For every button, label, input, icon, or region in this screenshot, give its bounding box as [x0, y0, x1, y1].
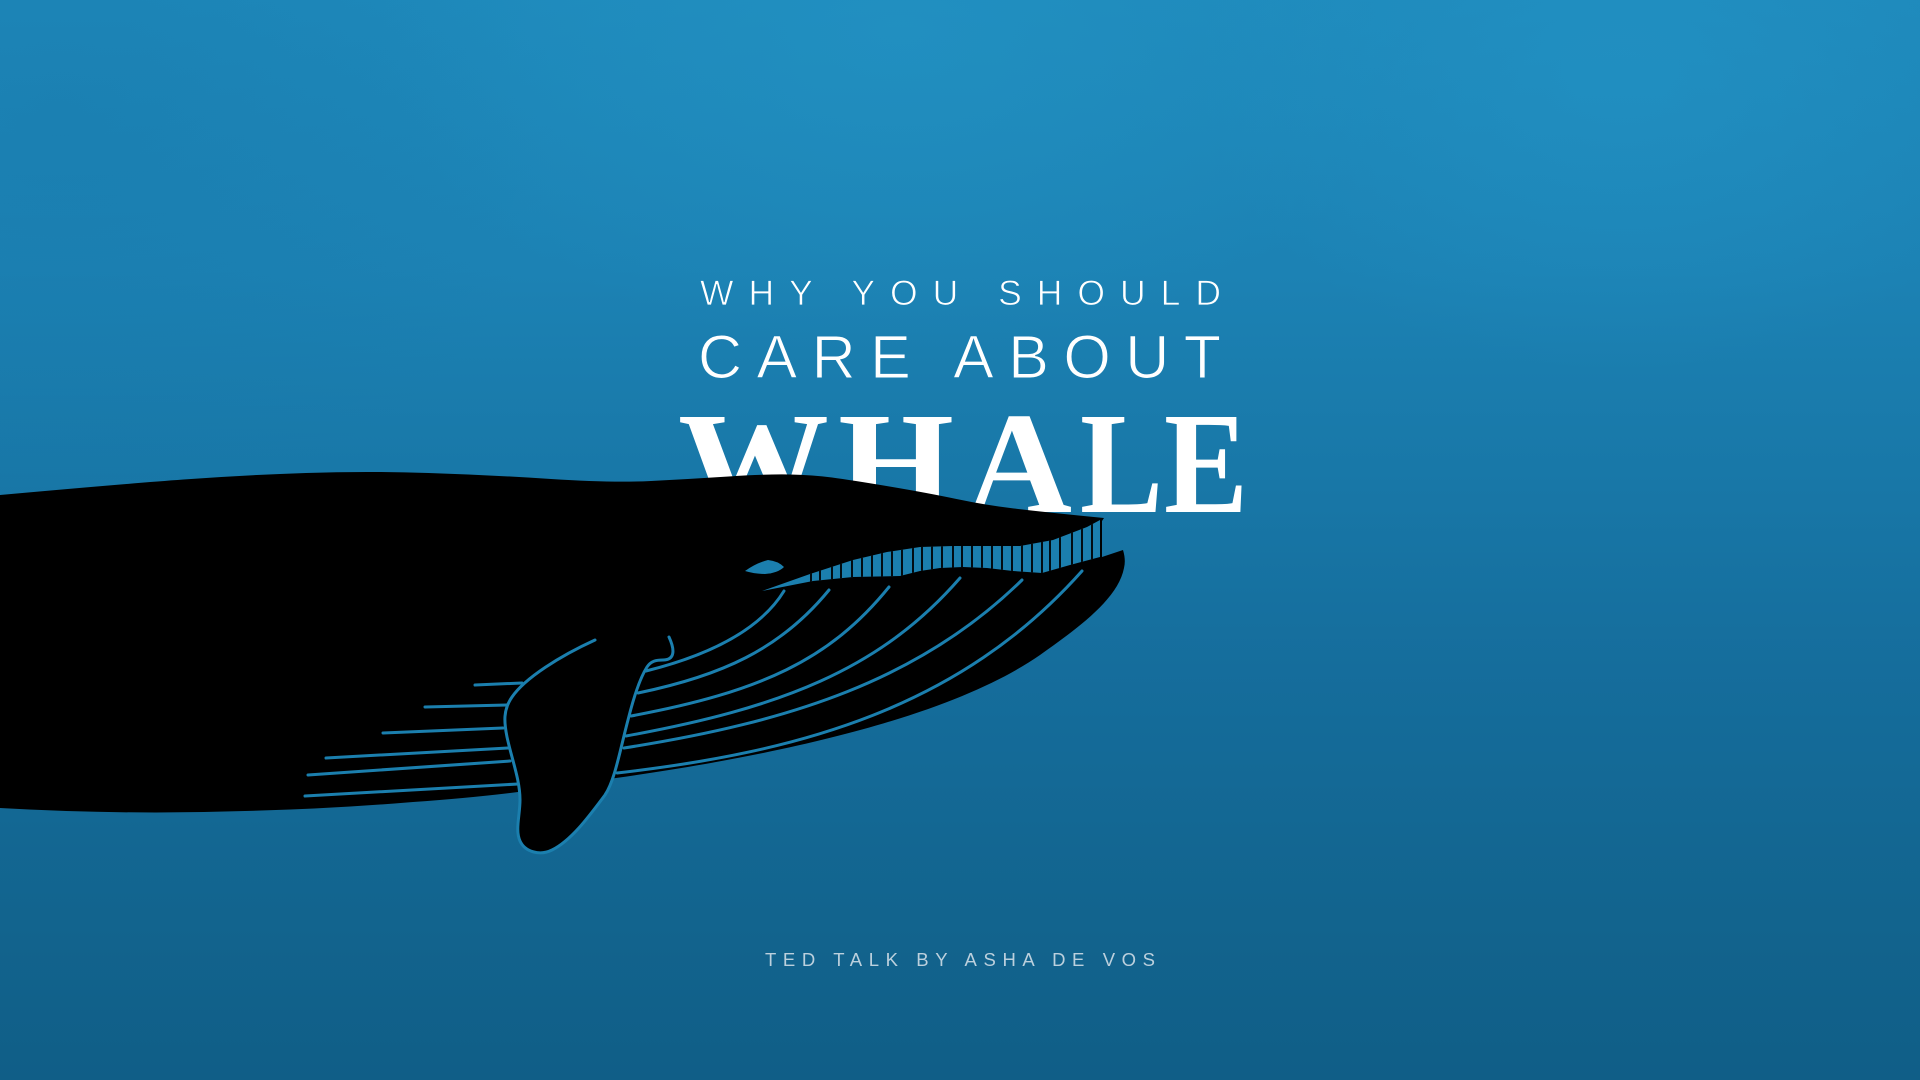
title line: whale: W [678, 384, 829, 544]
baleen plates [762, 520, 1100, 591]
eye [745, 560, 784, 574]
title line: whale: L [1080, 384, 1163, 544]
title line: whale: A [966, 384, 1072, 544]
whale body [0, 472, 1125, 812]
title line: whale: E [1164, 384, 1248, 544]
title line: why you should: WHY YOU SHOULD [700, 273, 1221, 313]
flipper [505, 637, 673, 853]
infographic artwork [0, 280, 1242, 966]
ventral grooves: throat [617, 571, 1082, 773]
subtitle: speaker credit: TED TALK BY ASHA DE VOS [765, 949, 1155, 970]
title line: care about: CARE ABOUT [698, 323, 1221, 391]
ventral grooves: rear body [305, 683, 522, 796]
whale illustration [0, 472, 1125, 853]
title line: whale: H [838, 384, 954, 544]
